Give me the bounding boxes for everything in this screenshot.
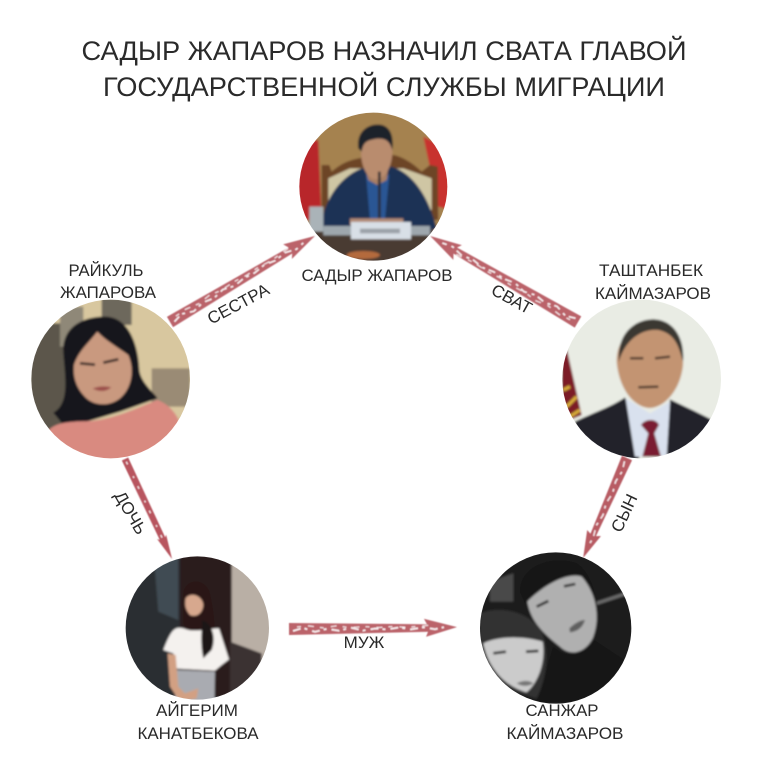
arrow: Raikul to Sadyr bbox=[165, 228, 319, 329]
label: Raikul Japarova: ЖАПАРОВА bbox=[60, 283, 157, 302]
portrait: Raikul Japarova bbox=[31, 300, 190, 458]
portrait: Tashtanbek Kaimazarov bbox=[562, 300, 721, 458]
label: Sanjar Kaimazarov bbox=[506, 701, 624, 743]
portrait: Aigerim Kanatbekova bbox=[126, 556, 269, 700]
arrow: Tashtanbek to Sadyr bbox=[426, 229, 582, 330]
label: Aigerim Kanatbekova: КАНАТБЕКОВА bbox=[138, 724, 259, 743]
label: СВАТ: СВАТ bbox=[488, 280, 535, 318]
label: Sanjar Kaimazarov: САНЖАР bbox=[526, 701, 598, 720]
label: Aigerim Kanatbekova bbox=[138, 701, 259, 743]
portrait: Sanjar Kaimazarov bbox=[480, 552, 632, 704]
label: Tashtanbek Kaimazarov bbox=[595, 261, 711, 303]
label: Raikul Japarova bbox=[60, 261, 157, 302]
title bbox=[82, 35, 686, 102]
label: МУЖ: МУЖ bbox=[344, 633, 385, 652]
label: Raikul Japarova: РАЙКУЛЬ bbox=[68, 261, 144, 280]
label: Sanjar Kaimazarov: КАЙМАЗАРОВ bbox=[506, 724, 624, 743]
arrow: Aigerim to Sanjar bbox=[289, 619, 457, 637]
label: Aigerim Kanatbekova: АЙГЕРИМ bbox=[156, 701, 238, 720]
arrow: Tashtanbek to Sanjar bbox=[576, 455, 634, 561]
label: Tashtanbek Kaimazarov: КАЙМАЗАРОВ bbox=[595, 284, 711, 303]
label: ДОЧЬ: ДОЧЬ bbox=[110, 488, 150, 538]
label: Tashtanbek Kaimazarov: ТАШТАНБЕК bbox=[599, 261, 703, 280]
label: Sadyr Japarov: САДЫР ЖАПАРОВ bbox=[302, 266, 452, 285]
title: ГОСУДАРСТВЕННОЙ СЛУЖБЫ МИГРАЦИИ bbox=[103, 71, 665, 102]
label: СЫН: СЫН bbox=[607, 491, 641, 535]
arrow: Raikul to Aigerim bbox=[120, 457, 177, 561]
label: СЕСТРА: СЕСТРА bbox=[204, 280, 273, 328]
portrait: Sadyr Japarov bbox=[299, 112, 448, 261]
title: САДЫР ЖАПАРОВ НАЗНАЧИЛ СВАТА ГЛАВОЙ bbox=[82, 35, 686, 66]
